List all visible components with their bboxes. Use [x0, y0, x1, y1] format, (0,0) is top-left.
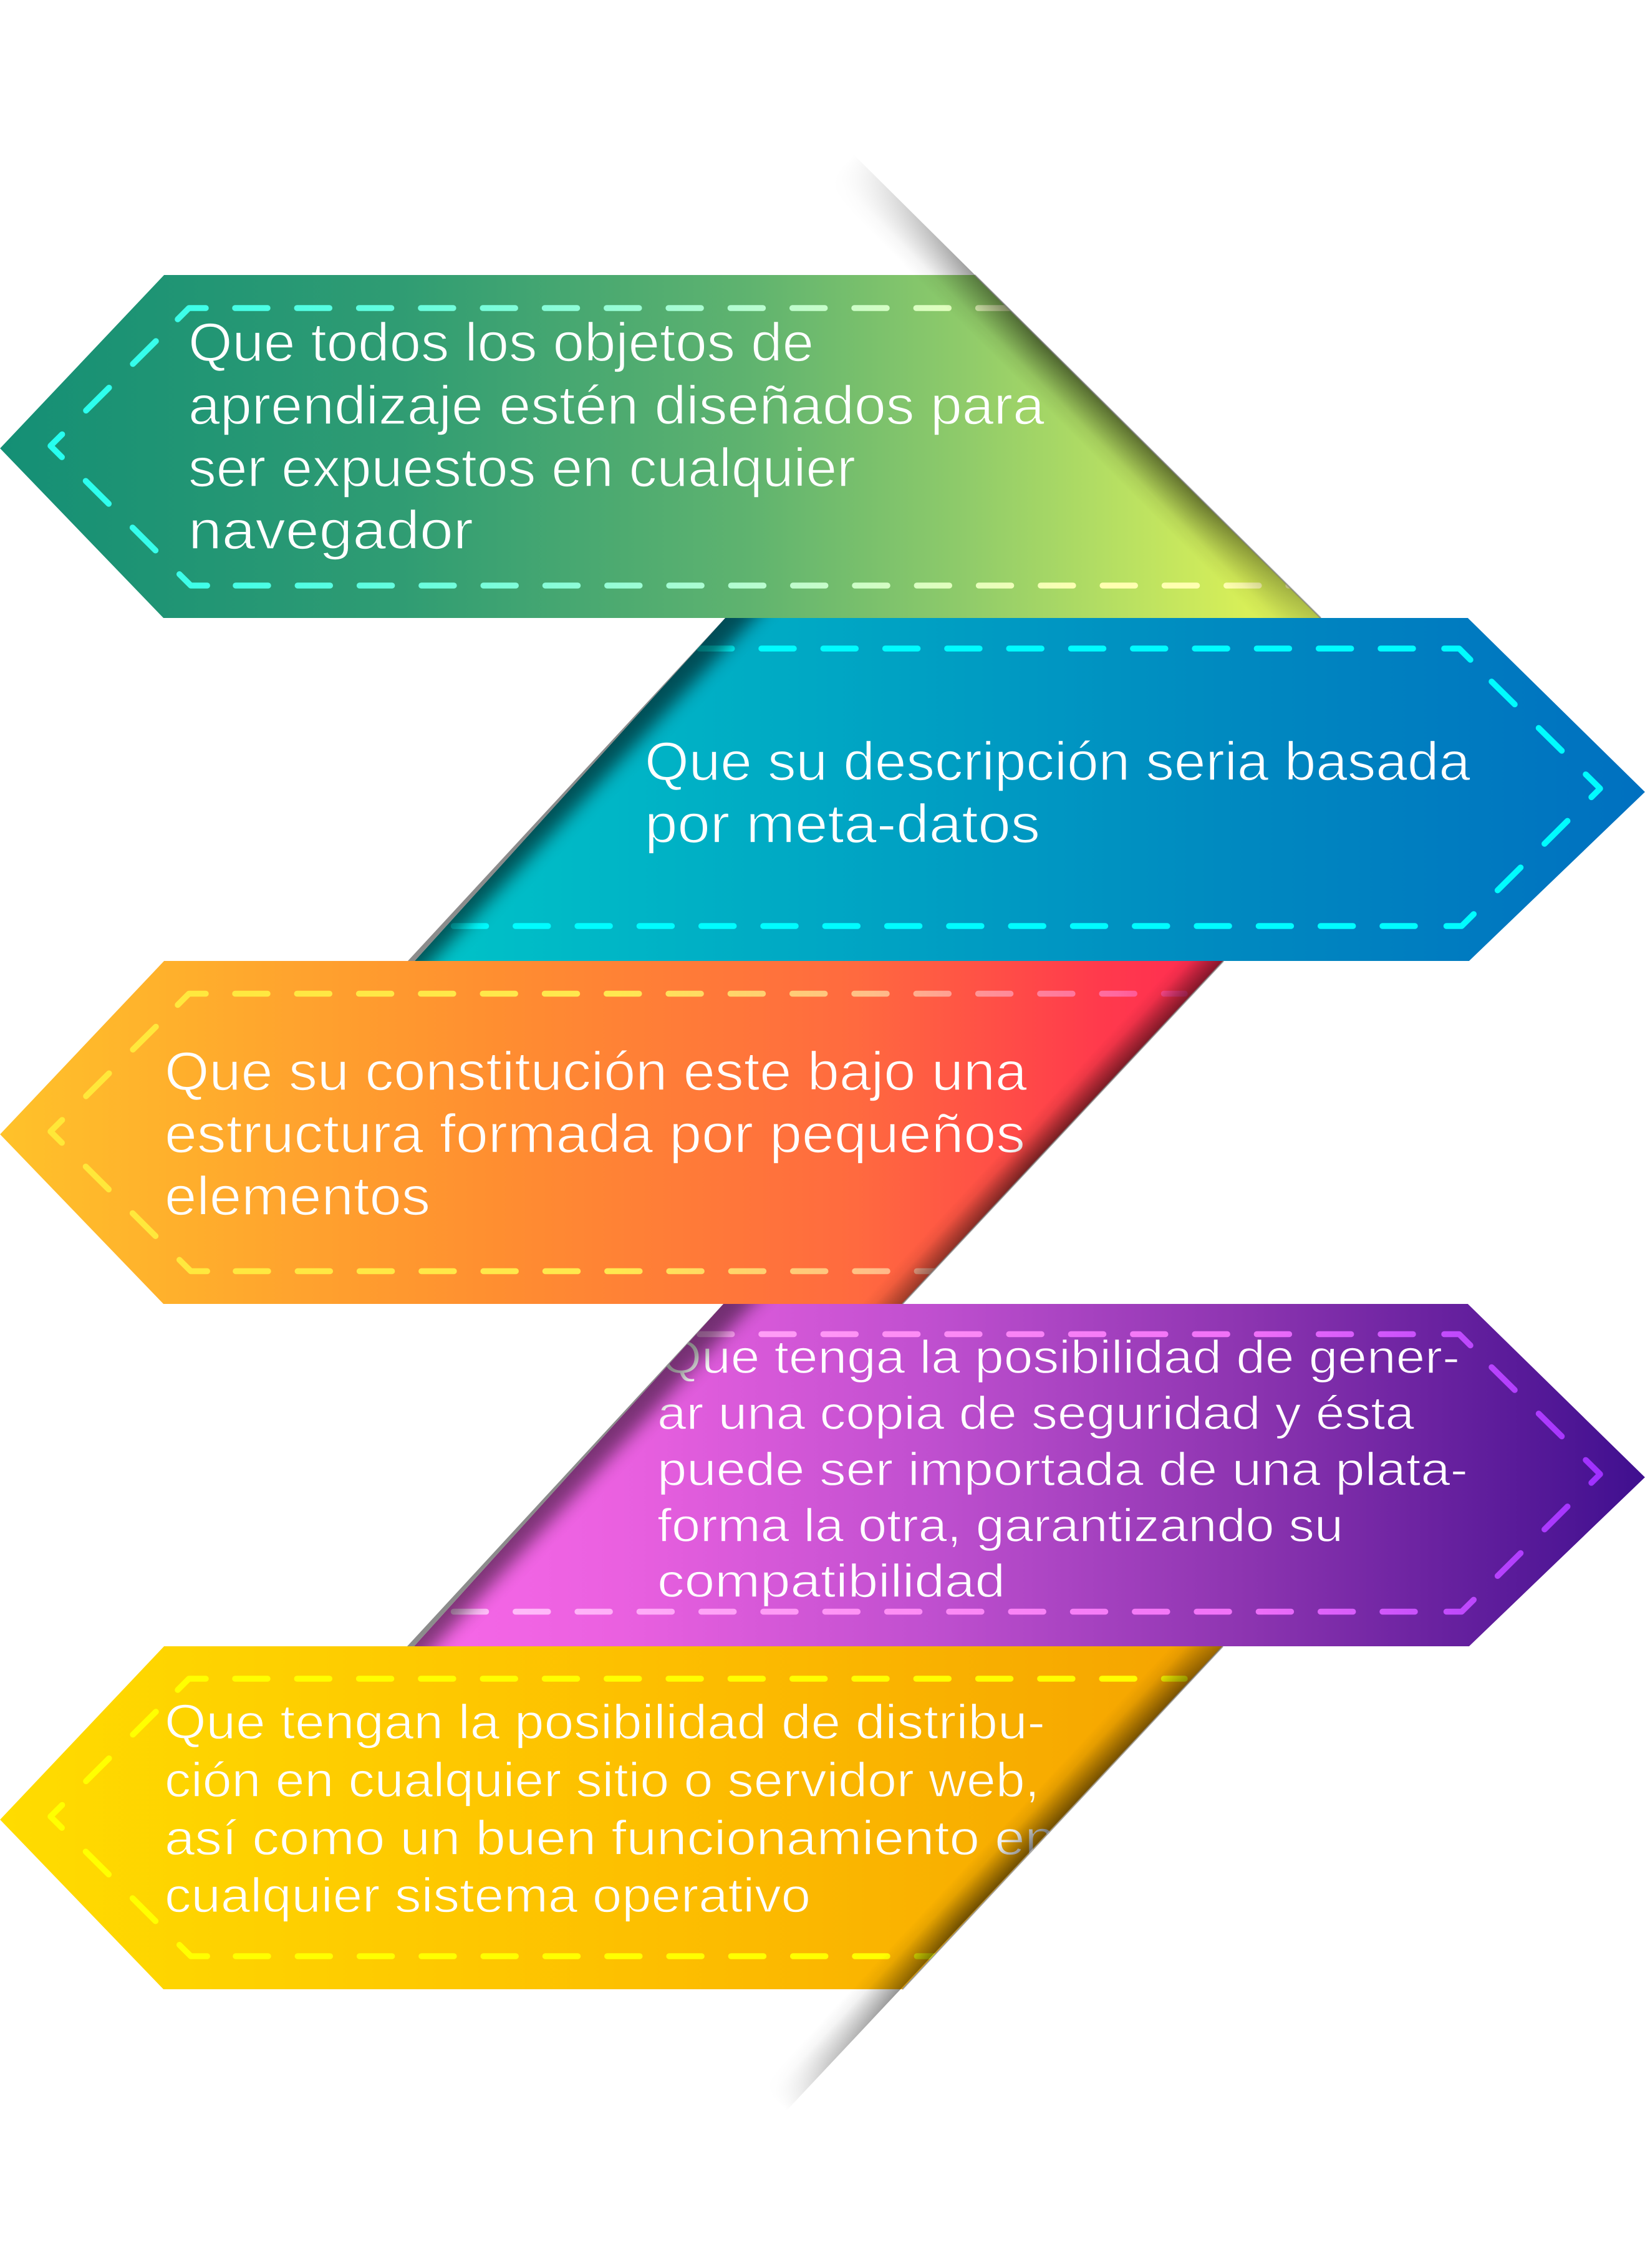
ribbon 2 fold shadow: [361, 599, 773, 979]
ribbon 2 dashed stitching: [312, 649, 1600, 926]
ribbon 3 fold shadow: [829, 961, 1223, 1304]
ribbon 3 body and content: [0, 961, 1223, 1304]
ribbon 4 body and content: [312, 1285, 1645, 1665]
ribbon 3 dashed stitching: [51, 994, 1185, 1271]
ribbon 1 text: ser expuestos en cualquier: [188, 438, 856, 498]
ribbon 3 text: elementos: [165, 1166, 430, 1227]
panel: ribbon 4 purple: [312, 1285, 1645, 1665]
ribbon 5 text: ción en cualquier sitio o servidor web,: [165, 1752, 1040, 1807]
ribbon 4 text: forma la otra, garantizando su: [657, 1499, 1343, 1551]
ribbon 5 text: así como un buen funcionamiento en: [165, 1810, 1055, 1865]
ribbon 5 text: [165, 1694, 1055, 1923]
ribbon 4 dashed stitching: [312, 1334, 1600, 1611]
ribbon 5 body and content: [0, 1646, 1223, 1989]
panel: ribbon 5 yellow: [0, 1646, 1223, 2111]
ribbon 2 grey fold sliver: [408, 618, 725, 961]
ribbon 1 text: navegador: [188, 500, 473, 561]
ribbon 2 text: por meta-datos: [645, 794, 1040, 854]
ribbon 2 text: Que su descripción seria basada: [645, 731, 1471, 792]
ribbon 4 text: puede ser importada de una plata-: [657, 1443, 1468, 1495]
ribbon 4 grey fold sliver: [407, 1304, 723, 1646]
ribbon 4 text: Que tenga la posibilidad de gener-: [661, 1331, 1460, 1383]
ribbon 2 text: [645, 731, 1471, 854]
panel: ribbon 1 green: [0, 155, 1372, 618]
ribbon 1 text: aprendizaje estén diseñados para: [188, 375, 1045, 436]
ribbon 3 text: Que su constitución este bajo una: [165, 1041, 1028, 1102]
ribbon 1 body and content: [0, 275, 1372, 618]
ribbon 2 body and content: [415, 618, 1645, 961]
ribbon 1 dashed stitching: [51, 308, 1372, 586]
ribbon 1 fold shadow: [822, 155, 1321, 618]
ribbon 4 fold shadow: [360, 1285, 771, 1665]
ribbon 4 text: compatibilidad: [657, 1555, 1005, 1607]
ribbon 4 text: ar una copia de seguridad y ésta: [657, 1387, 1414, 1439]
ribbon 5 fold shadow: [711, 1646, 1223, 2111]
ribbon 4 text: [657, 1331, 1468, 1607]
ribbon 5 text: Que tengan la posibilidad de distribu-: [165, 1694, 1045, 1749]
ribbon 5 text: cualquier sistema operativo: [165, 1868, 811, 1923]
ribbon 3 text: [165, 1041, 1028, 1227]
panel: ribbon 3 orange: [0, 961, 1223, 1304]
panel: ribbon 2 blue: [408, 618, 1645, 961]
ribbon 3 text: estructura formada por pequeños: [165, 1104, 1025, 1164]
ribbon 1 text: [188, 312, 1045, 561]
ribbon 5 dashed stitching: [51, 1679, 1185, 1956]
fold edge lines: [902, 275, 1321, 1989]
ribbon 1 text: Que todos los objetos de: [188, 312, 814, 373]
